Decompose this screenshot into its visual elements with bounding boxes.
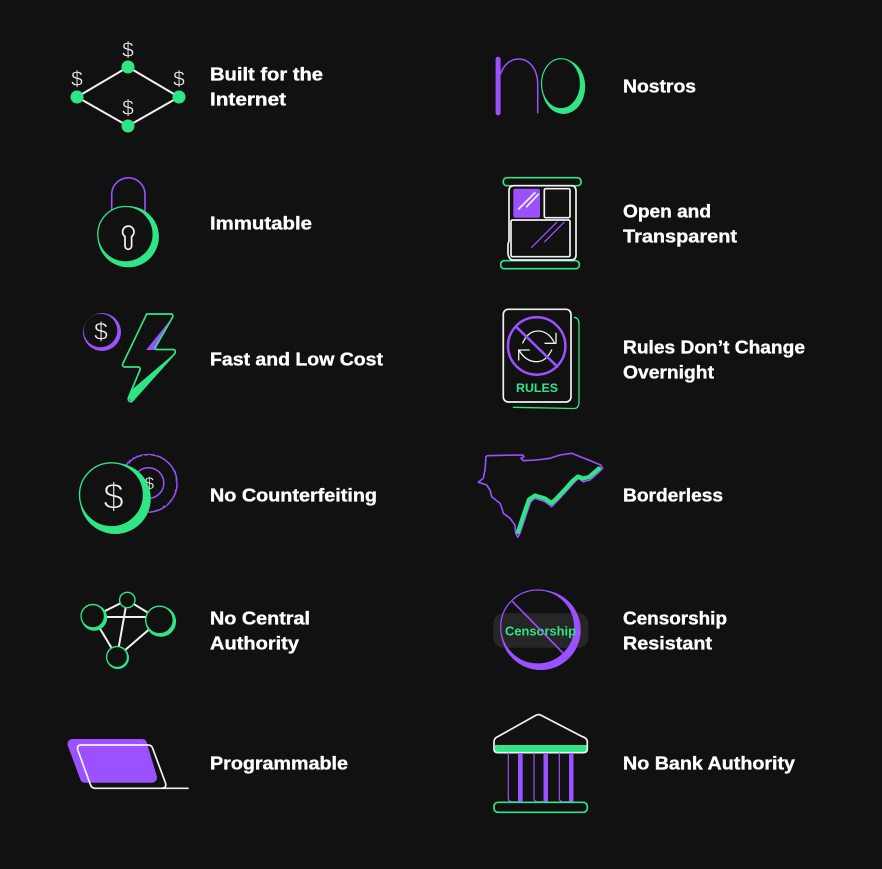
label: Built for the Internet: [210, 65, 323, 110]
icon: built for the internet diamond network: $: [71, 68, 83, 91]
label: Open and Transparent: Open and: [623, 202, 711, 222]
icon: censorship resistant: [493, 590, 588, 670]
label: No Counterfeiting: No Counterfeiting: [210, 486, 377, 506]
icon: programmable card: [72, 744, 188, 788]
label: No Central Authority: [210, 609, 310, 654]
icon: censorship resistant: Censorship: [505, 624, 576, 638]
icon: borderless map outline: [478, 453, 603, 537]
label: Nostros: Nostros: [623, 77, 696, 97]
label: Built for the Internet: Internet: [210, 90, 286, 110]
icon: bank building: [494, 715, 587, 812]
label: No Central Authority: No Central: [210, 609, 310, 629]
label: No Central Authority: Authority: [210, 634, 299, 654]
label: Censorship Resistant: [623, 609, 727, 654]
icon: built for the internet diamond network: $: [122, 39, 134, 62]
icon: rules document: [503, 309, 579, 408]
label: Fast and Low Cost: Fast and Low Cost: [210, 350, 383, 370]
icon: rules document: RULES: [516, 381, 558, 395]
icon: coin and lightning bolt: [83, 313, 175, 402]
icon: open and transparent window: [501, 178, 581, 269]
icon: padlock: [98, 178, 159, 267]
icon: no letters: [496, 57, 585, 115]
label: Censorship Resistant: Resistant: [623, 634, 712, 654]
label: Built for the Internet: Built for the: [210, 65, 323, 85]
icon: coin and lightning bolt: $: [94, 318, 108, 346]
icon: counterfeit coins: $: [103, 476, 124, 517]
label: Censorship Resistant: Censorship: [623, 609, 727, 629]
label: Borderless: Borderless: [623, 486, 723, 506]
label: Rules Don't Change Overnight: Rules Don’t Change: [623, 338, 805, 358]
label: Immutable: Immutable: [210, 214, 312, 234]
icon: built for the internet diamond network: $: [173, 68, 185, 91]
icon: counterfeit coins: $: [145, 474, 155, 493]
icon: built for the internet diamond network: $: [122, 97, 134, 120]
label: Rules Don't Change Overnight: [623, 338, 805, 382]
label: No Bank Authority: No Bank Authority: [623, 754, 795, 774]
icon: no central authority network: [81, 592, 176, 669]
label: Programmable: Programmable: [210, 754, 348, 774]
label: Open and Transparent: Transparent: [623, 226, 737, 246]
label: Rules Don't Change Overnight: Overnight: [623, 362, 714, 382]
icon: counterfeit coins: [80, 455, 177, 534]
label: Open and Transparent: [623, 202, 737, 246]
icon: built for the internet diamond network: [70, 39, 186, 132]
